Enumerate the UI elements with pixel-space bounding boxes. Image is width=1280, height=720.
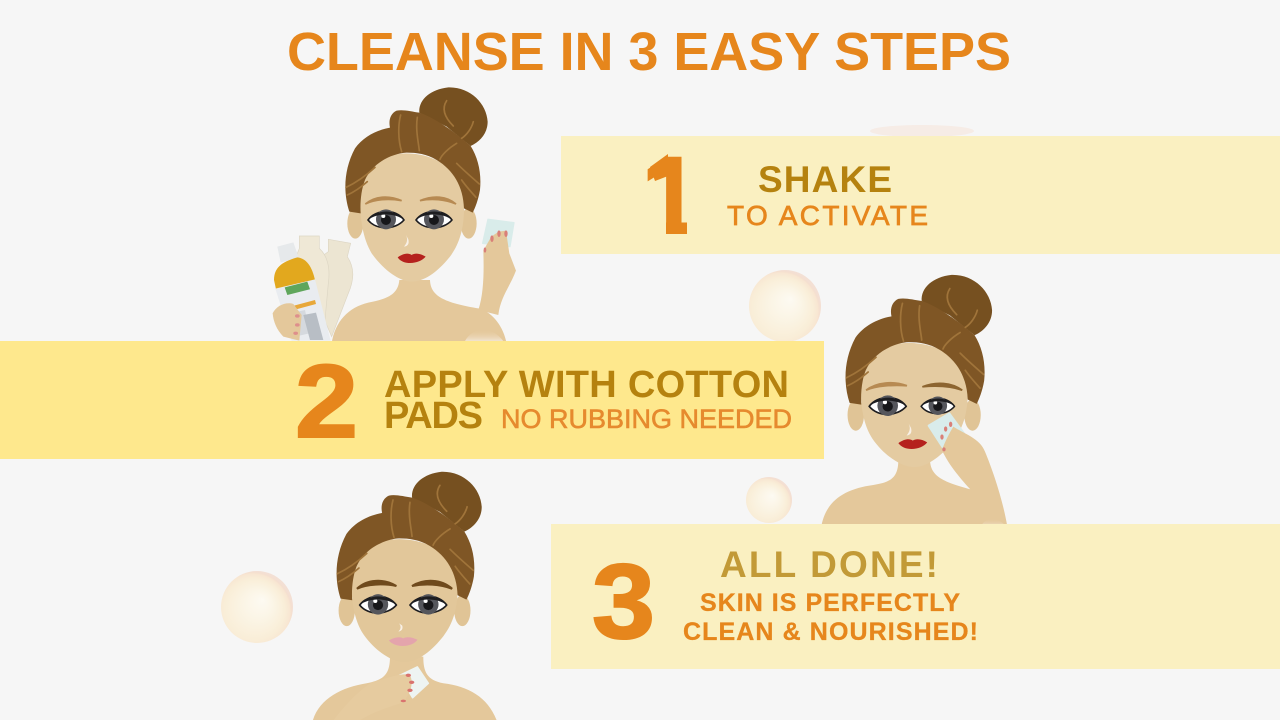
step number 1: 1 (640, 133, 702, 258)
icon: cotton pad and hand (330, 667, 428, 720)
head (345, 87, 488, 282)
bubble: behind step 1 panel (870, 125, 974, 137)
step 1 subtext: TO ACTIVATE (727, 200, 928, 231)
bubble: small middle (746, 477, 792, 523)
hand on bottle (273, 303, 302, 341)
step 3 subtext line 2: CLEAN & NOURISHED! (683, 618, 978, 646)
woman 1 holding bottles and cotton pad (273, 87, 516, 343)
title: CLEANSE IN 3 EASY STEPS (287, 22, 1011, 82)
icon: cotton pad (483, 219, 514, 247)
raised hand (478, 230, 516, 315)
shoulders (312, 657, 498, 720)
body and raised arm (332, 280, 507, 343)
bubble: lower left (221, 571, 293, 643)
panel: step 3 (551, 524, 1280, 669)
shoulders (821, 460, 1007, 528)
woman 2 applying cotton pad (821, 275, 1008, 528)
step 3 subtext line 1: SKIN IS PERFECTLY (700, 589, 960, 617)
bottles (273, 236, 353, 341)
step 2 heading line 2: PADS (384, 395, 483, 437)
bubble: upper middle (749, 270, 821, 342)
step number 2: 2 (295, 344, 358, 460)
icon: cotton pad and hand (929, 413, 1008, 528)
woman 3 with cotton pad at neck (312, 472, 498, 720)
mask: removes numeral foot (636, 216, 716, 240)
step 1 heading: SHAKE (758, 159, 892, 200)
step 2 heading line 1: APPLY WITH COTTON (384, 364, 789, 406)
panel: step 2 (0, 341, 824, 460)
step 3 heading: ALL DONE! (720, 544, 938, 585)
head (337, 472, 482, 662)
step number 3: 3 (592, 543, 655, 661)
panel: step 1 (561, 133, 1280, 258)
numeral 1 flag (650, 154, 668, 181)
head (846, 275, 992, 467)
step 2 subtext: NO RUBBING NEEDED (501, 404, 792, 434)
